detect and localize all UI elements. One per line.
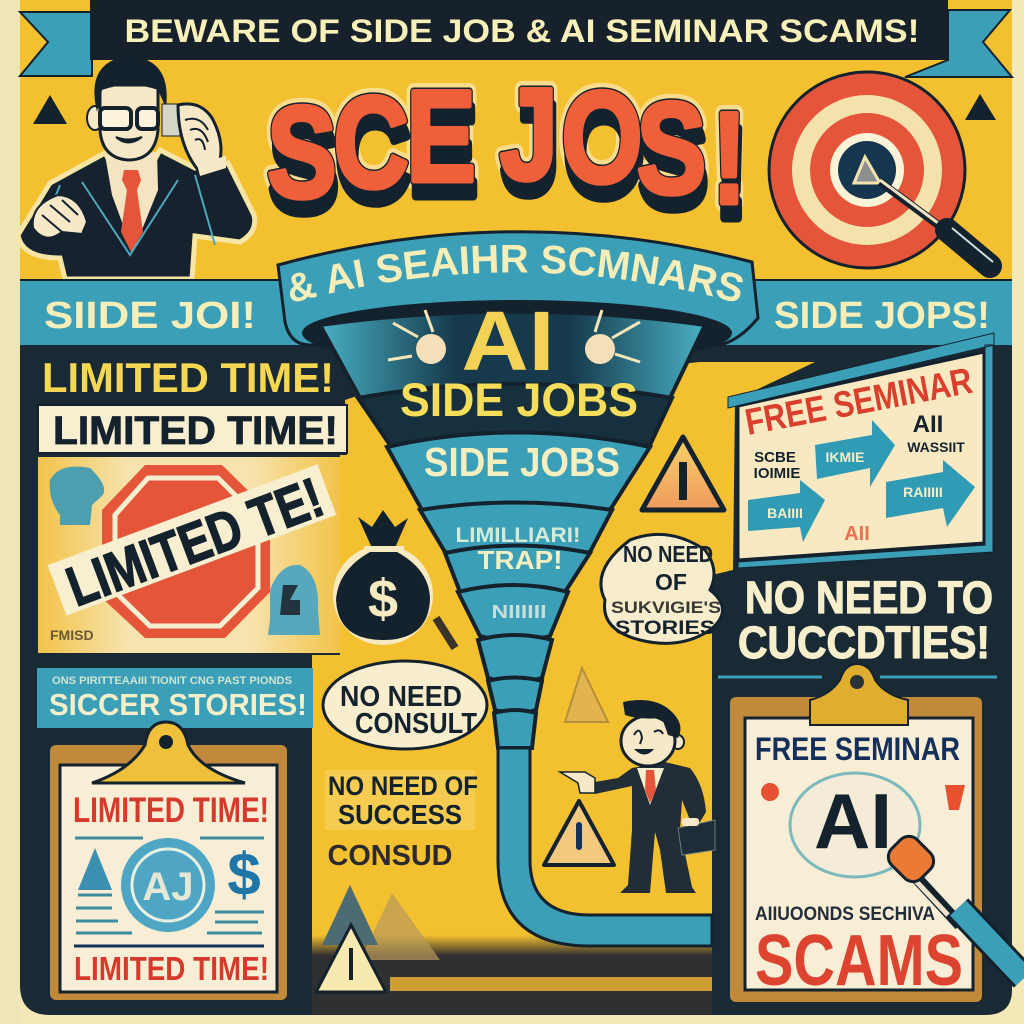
AI emblem: [761, 773, 965, 877]
funnel labels: [400, 294, 638, 622]
panel: limited time headings: [38, 354, 347, 453]
AI emblem: AI: [814, 777, 892, 865]
panel: success stories strip: [37, 668, 313, 728]
clip: [810, 664, 908, 725]
text block: no need of success: [325, 770, 478, 872]
callout: no need consult: NO NEED: [340, 681, 462, 713]
panel: success stories strip: SICCER STORIES!: [49, 687, 307, 722]
funnel labels: SIDE JOBS: [424, 439, 620, 485]
limited tag strip: LIMITED TE!: [58, 465, 331, 618]
panel: limited time clipboard: LIMITED TIME!: [73, 791, 269, 830]
title banner: [90, 0, 948, 60]
panel: limited time clipboard: LIMITED TIME!: [74, 950, 269, 987]
funnel rim with text: [276, 230, 760, 351]
shirt and tie: [50, 152, 215, 255]
panel: free seminar projector board: IKMIE: [826, 449, 864, 465]
callout: no need of stories: NO NEED: [623, 541, 713, 567]
icon: money bag: [333, 510, 455, 648]
icon: stacked warning triangles: [316, 885, 440, 992]
funnel labels: TRAP!: [478, 545, 562, 575]
main headline: SCE JOS!: [267, 61, 747, 231]
icon: bell: [78, 848, 112, 890]
funnel labels: AI: [462, 294, 554, 388]
arrows: [748, 420, 975, 542]
icon: businessman with glasses: [18, 56, 255, 279]
callout: no need of stories: STORIES: [615, 618, 715, 639]
shirt and tie: [637, 768, 664, 805]
panel: free seminar clipboard: FREE SEMINAR: [755, 731, 960, 767]
panel: free seminar projector board: IOIMIE: [754, 465, 800, 482]
panel: limited time headings: LIMITED TIME!: [53, 409, 338, 453]
panel: free seminar projector board: SCBE: [754, 449, 796, 466]
text block: no need of success: SUCCESS: [338, 799, 462, 830]
funnel rings: [320, 312, 705, 748]
callout: no need consult: CONSULT: [355, 708, 477, 740]
text block: no need to: NO NEED TO: [745, 572, 993, 623]
blue banner band: SIDE JOPS!: [774, 295, 990, 337]
callout: no need consult: [323, 661, 487, 749]
icon: warning triangle small: [544, 801, 614, 865]
pointing hand: [560, 772, 595, 793]
main headline: SCE JOS!: [269, 76, 749, 246]
panel: limited time clipboard: [50, 722, 287, 1000]
icon: pointing businessman: [560, 700, 715, 893]
icon: blue figure: [268, 565, 320, 635]
panel: stop sign poster: [38, 457, 340, 653]
text block: no need to: CUCCDTIES!: [738, 617, 990, 668]
head: [87, 56, 167, 160]
main headline: SCE JOS!: [267, 61, 747, 231]
clip: [92, 722, 245, 783]
raised hand with card: [162, 104, 226, 176]
head: [621, 700, 684, 766]
icon: AI badge: [121, 838, 215, 932]
title banner: BEWARE OF SIDE JOB & AI SEMINAR SCAMS!: [124, 13, 920, 49]
suit: [18, 150, 255, 279]
callout: no need of stories: SUKVIGIE'S: [611, 598, 721, 617]
divider line: [718, 676, 997, 678]
panel: stop sign poster: FMISD: [50, 627, 94, 643]
pointing fist: [33, 195, 87, 238]
callout: no need of stories: [601, 534, 722, 643]
panel: free seminar projector board: FREE SEMINAR: [742, 360, 975, 443]
blue banner band: [20, 280, 1012, 345]
panel: free seminar clipboard: AIIUOONDS SECHIVA: [755, 904, 935, 925]
panel: free seminar clipboard: SCAMS: [755, 921, 963, 1001]
icon: target with dart: [769, 72, 993, 268]
icon: small warning triangle right: [965, 94, 996, 120]
panel: limited time headings: LIMITED TIME!: [42, 354, 334, 401]
panel: limited time clipboard: $: [227, 841, 261, 908]
body and legs: [595, 762, 706, 893]
light bulbs: [388, 310, 640, 364]
icon: blue head: [50, 466, 104, 525]
funnel labels: SIDE JOBS: [400, 373, 638, 426]
icon: faded warning triangle: [565, 668, 608, 722]
text block: no need of success: CONSUD: [328, 840, 452, 872]
briefcase: [678, 818, 715, 855]
header ribbons: [20, 10, 1012, 77]
blue banner band: SIIDE JOI!: [44, 295, 256, 337]
text block: no need of success: NO NEED OF: [328, 771, 478, 801]
text block: no need to: [738, 572, 993, 668]
panel: free seminar projector board: AII: [844, 523, 870, 545]
pipe outlet: [498, 748, 712, 946]
panel: free seminar clipboard: [730, 664, 1024, 1002]
panel: free seminar projector board: RAIIIII: [903, 484, 943, 500]
panel: free seminar projector board: BAIIII: [767, 505, 803, 521]
panel: seminar funnel: [276, 230, 760, 948]
panel: free seminar projector board: AII: [913, 411, 943, 438]
panel: free seminar projector board: WASSIIT: [907, 439, 965, 455]
callout: no need of stories: OF: [655, 569, 687, 595]
panel: free seminar projector board: [728, 333, 994, 568]
icon: AI badge: AJ: [142, 865, 194, 909]
icon: warning triangle: [642, 437, 724, 510]
funnel rim with text: & AI SEAIHR SCMNARS: [290, 245, 743, 302]
panel: success stories strip: ONS PIRITTEAAIII TIONIT CNG PAST PIONDS: [52, 675, 292, 687]
icon: marker pen: [883, 831, 1024, 978]
funnel labels: LIMILLIARI!: [456, 524, 580, 547]
funnel labels: NIIIIII: [492, 602, 546, 622]
icon: money bag: $: [368, 569, 398, 629]
icon: small warning triangle left: [33, 95, 67, 124]
main headline: SCE JOS!: [267, 61, 747, 231]
